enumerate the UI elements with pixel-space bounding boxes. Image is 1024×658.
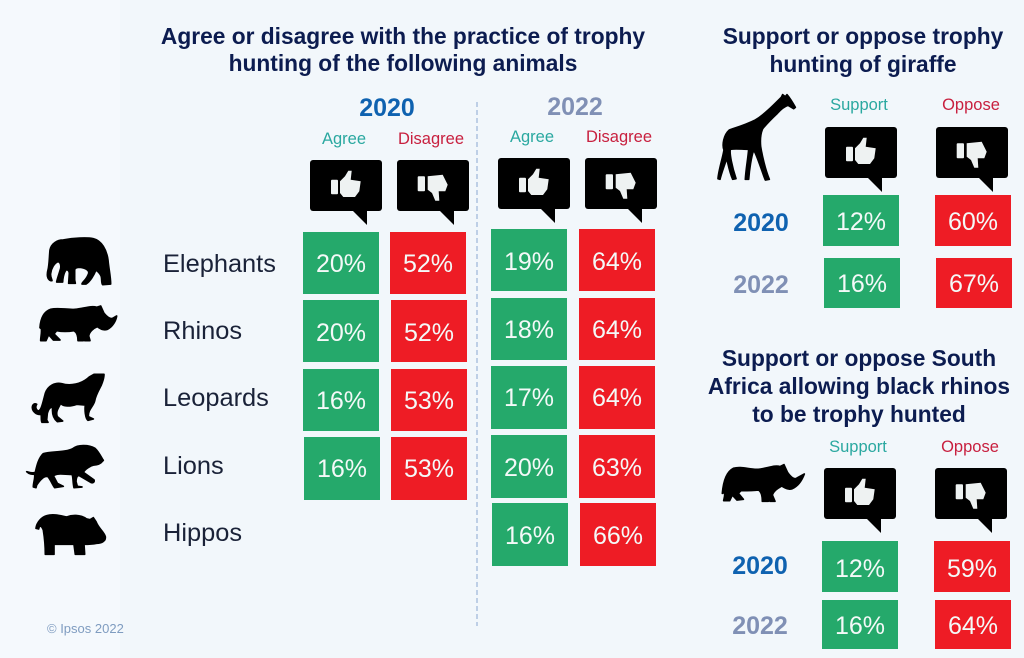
row: giraffe 2022: 16% <box>837 270 887 298</box>
row: rhino 2020: 2020 <box>732 552 788 580</box>
year heading 2020: 2020 <box>359 94 415 122</box>
label: leopards: Leopards <box>163 384 269 412</box>
heading: black rhino: Africa allowing black rhinos <box>708 373 1010 399</box>
row: rhino 2020 <box>732 541 1010 592</box>
values: hippos: 16% <box>505 522 555 550</box>
support and oppose labels: Support <box>829 438 887 456</box>
2022 column headers: Disagree <box>586 128 652 146</box>
year heading 2022: 2022 <box>547 93 603 121</box>
title: main question <box>161 23 645 76</box>
row: lions <box>27 435 655 500</box>
row: giraffe 2020: 2020 <box>733 209 789 237</box>
values: leopards <box>303 366 655 431</box>
row: giraffe 2022: 67% <box>949 270 999 298</box>
values: rhinos: 18% <box>504 316 554 344</box>
values: hippos <box>492 503 656 566</box>
values: rhinos <box>303 298 655 362</box>
panel: black rhino <box>708 345 1011 649</box>
icon: thumbs up 2020 <box>310 160 382 225</box>
2022 column headers: Agree <box>510 128 554 146</box>
copyright: © Ipsos 2022 <box>47 621 124 636</box>
row: rhino 2022 <box>732 600 1011 649</box>
support and oppose labels <box>830 96 1000 114</box>
heading: giraffe: Support or oppose trophy <box>723 23 1004 49</box>
support and oppose labels <box>829 438 999 456</box>
2022 column headers <box>510 128 652 146</box>
values: lions: 53% <box>404 455 454 483</box>
icon: thumbs down rhino <box>935 468 1007 533</box>
icon: black rhino <box>722 465 804 501</box>
values: lions: 63% <box>592 454 642 482</box>
values: leopards: 53% <box>404 387 454 415</box>
row: rhino 2020: 12% <box>835 555 885 583</box>
icon: leopard <box>32 374 104 422</box>
values: elephants: 19% <box>504 248 554 276</box>
values: rhinos: 64% <box>592 316 642 344</box>
2020 column headers <box>322 130 464 148</box>
icon: thumbs down giraffe <box>936 127 1008 192</box>
row: leopards <box>32 366 655 431</box>
values: lions: 16% <box>317 455 367 483</box>
row: rhinos <box>40 298 655 362</box>
2020 column headers: Disagree <box>398 130 464 148</box>
label: lions: Lions <box>163 452 224 480</box>
values: leopards: 64% <box>592 384 642 412</box>
icon: thumbs down 2022 <box>585 158 657 223</box>
values: leopards: 17% <box>504 384 554 412</box>
column divider <box>476 102 478 626</box>
row: rhino 2022: 64% <box>948 612 998 640</box>
icon: lion <box>27 446 103 488</box>
row: elephants <box>47 229 655 294</box>
heading: giraffe <box>723 23 1004 77</box>
label: elephants: Elephants <box>163 250 276 278</box>
support and oppose labels: Oppose <box>941 438 999 456</box>
title: main question: Agree or disagree with the practice of trophy <box>161 23 645 49</box>
heading: giraffe: hunting of giraffe <box>769 51 957 77</box>
row: giraffe 2020 <box>733 195 1011 246</box>
row: giraffe 2020: 12% <box>836 208 886 236</box>
values: rhinos: 20% <box>316 319 366 347</box>
heading: black rhino: to be trophy hunted <box>752 401 966 427</box>
values: hippos: 66% <box>593 522 643 550</box>
support and oppose labels: Oppose <box>942 96 1000 114</box>
row: hippos <box>36 503 656 566</box>
row: giraffe 2022: 2022 <box>733 271 789 299</box>
icon: hippo <box>36 515 105 554</box>
values: elephants: 52% <box>403 250 453 278</box>
icon: thumbs up 2022 <box>498 158 570 223</box>
icon: giraffe <box>718 95 795 180</box>
values: elephants: 64% <box>592 248 642 276</box>
row: rhino 2020: 59% <box>947 555 997 583</box>
title: main question: hunting of the following animals <box>229 50 577 76</box>
label: hippos: Hippos <box>163 519 242 547</box>
support and oppose labels: Support <box>830 96 888 114</box>
heading: black rhino: Support or oppose South <box>722 345 996 371</box>
values: leopards: 16% <box>316 387 366 415</box>
row: rhino 2022: 2022 <box>732 612 788 640</box>
label: rhinos: Rhinos <box>163 317 242 345</box>
icon: thumbs down 2020 <box>397 160 469 225</box>
heading: black rhino <box>708 345 1010 427</box>
panel: giraffe <box>718 23 1012 308</box>
values: lions <box>304 435 655 500</box>
icon: thumbs up rhino <box>824 468 896 533</box>
values: lions: 20% <box>504 454 554 482</box>
icon: rhino <box>40 306 117 341</box>
2020 column headers: Agree <box>322 130 366 148</box>
row: giraffe 2022 <box>733 258 1012 308</box>
values: elephants: 20% <box>316 250 366 278</box>
row: rhino 2022: 16% <box>835 612 885 640</box>
values: rhinos: 52% <box>404 319 454 347</box>
icon: elephant <box>47 238 111 285</box>
row: giraffe 2020: 60% <box>948 208 998 236</box>
icon: thumbs up giraffe <box>825 127 897 192</box>
values: elephants <box>303 229 655 294</box>
